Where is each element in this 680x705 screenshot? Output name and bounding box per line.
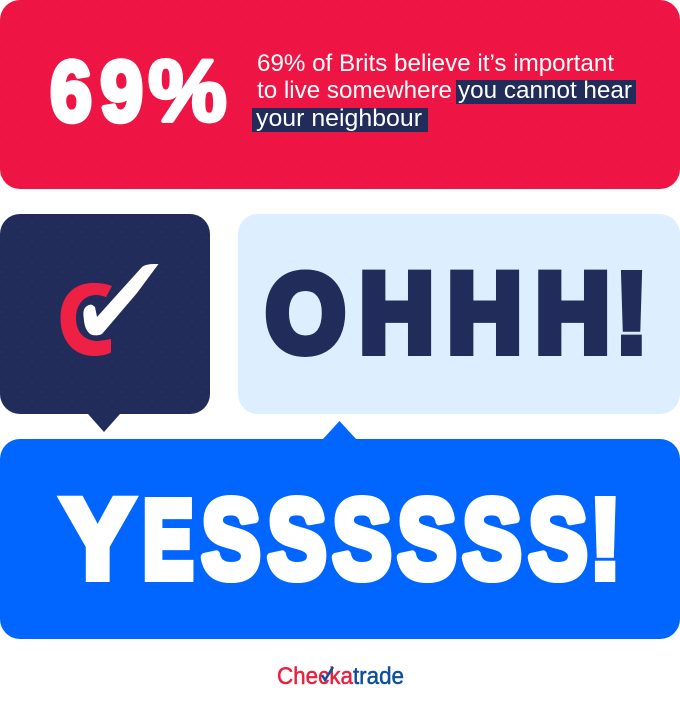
icon: wordmark tick	[322, 667, 333, 680]
logo: Checkatrade wordmark: Checkatrade	[277, 663, 404, 690]
text line one: 69% of Brits believe it’s important	[257, 50, 614, 77]
heading: YESSSSSS!: S	[333, 477, 391, 602]
big statistic: 69%: 6	[50, 44, 92, 138]
panel: navy speech bubble with logo mark	[0, 214, 210, 432]
big statistic: 69%: %	[148, 43, 227, 140]
heading: YESSSSSS!: !	[588, 474, 623, 604]
heading: OHHH!	[266, 248, 650, 378]
panel: light blue speech box	[238, 214, 680, 414]
heading: YESSSSSS!: S	[529, 477, 587, 602]
text line three highlighted: your neighbour	[256, 105, 422, 132]
heading: OHHH!: H	[448, 251, 522, 375]
icon: white tick of logo	[83, 264, 158, 335]
heading: OHHH!: H	[360, 251, 434, 375]
highlight: line three	[252, 108, 428, 132]
big statistic: 69%: 9	[100, 45, 143, 139]
highlight: line two	[456, 80, 636, 104]
heading: YESSSSSS!: E	[143, 479, 193, 600]
heading: YESSSSSS!: S	[463, 477, 521, 602]
heading: OHHH!: !	[614, 248, 650, 378]
heading: YESSSSSS!: S	[398, 477, 456, 602]
panel: blue speech bubble	[0, 421, 680, 639]
statistic description text	[252, 50, 636, 132]
heading: YESSSSSS!: S	[268, 477, 326, 602]
big statistic: 69%	[50, 43, 227, 140]
heading: OHHH!: H	[536, 251, 610, 375]
heading: YESSSSSS!: Y	[62, 477, 133, 602]
icon: red C of logo	[60, 283, 112, 356]
heading: YESSSSSS!	[62, 474, 623, 604]
heading: OHHH!: O	[266, 252, 345, 375]
heading: YESSSSSS!: S	[202, 477, 260, 602]
text line two highlighted: you cannot hear	[458, 77, 632, 104]
panel: red statistic banner	[0, 0, 680, 189]
text line two: to live somewhere	[257, 77, 452, 104]
